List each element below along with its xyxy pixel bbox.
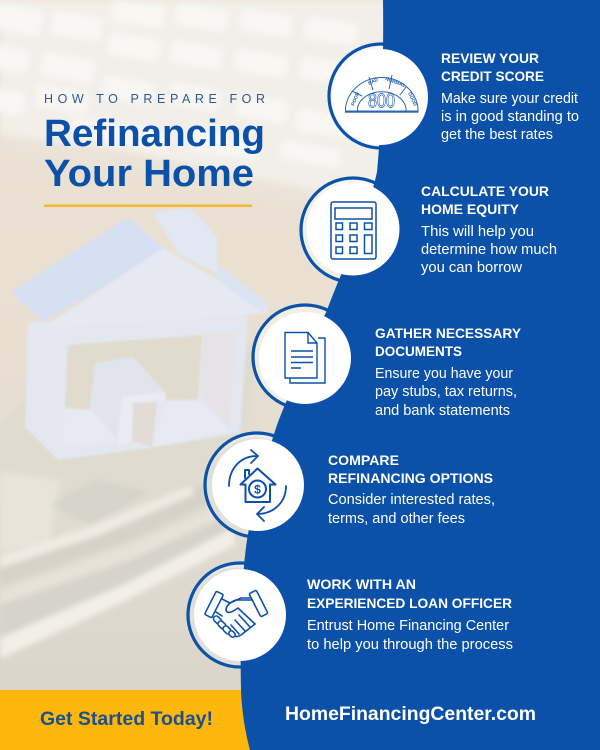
title underline — [44, 204, 252, 207]
text: calculate home equity: you can borrow — [421, 260, 523, 276]
text: experienced loan officer: EXPERIENCED LOAN OFFICER — [307, 595, 512, 611]
text: compare refinancing options: REFINANCING OPTIONS — [328, 470, 493, 486]
text: compare refinancing options — [328, 452, 495, 527]
text: calculate home equity: HOME EQUITY — [421, 201, 520, 217]
text: calculate home equity: determine how much — [421, 242, 557, 258]
text: calculate home equity: This will help you — [421, 224, 534, 240]
icon: calculator — [306, 182, 400, 276]
text: calculate home equity — [421, 183, 557, 276]
text: gather documents — [375, 325, 522, 419]
icon: credit score gauge: 800 — [368, 90, 395, 112]
main title — [44, 113, 265, 195]
text: gather documents: and bank statements — [375, 403, 510, 419]
text: experienced loan officer: to help you through the process — [307, 637, 513, 653]
text: review credit score: Make sure your credit — [441, 91, 578, 107]
small heading: HOW TO PREPARE FOR — [44, 92, 265, 106]
main title: Your Home — [44, 153, 254, 195]
text: review credit score: CREDIT SCORE — [441, 68, 544, 84]
text: review credit score: get the best rates — [441, 127, 553, 143]
text: experienced loan officer — [307, 576, 513, 653]
text: gather documents: GATHER NECESSARY — [375, 325, 522, 341]
text: compare refinancing options: COMPARE — [328, 452, 399, 468]
text: experienced loan officer: Entrust Home Financing Center — [307, 618, 509, 634]
text: review credit score — [441, 50, 579, 143]
icon: credit score gauge: NORMAL — [384, 76, 406, 89]
step 1: credit score — [332, 49, 579, 145]
icon: house with refresh arrows: $ — [254, 482, 261, 496]
icon: credit score gauge: BAD — [367, 77, 380, 87]
step 4: compare options — [212, 439, 495, 531]
step 2: home equity — [306, 182, 557, 276]
main title: Refinancing — [44, 113, 265, 155]
house model — [11, 208, 268, 460]
text: review credit score: REVIEW YOUR — [441, 50, 539, 66]
text: compare refinancing options: terms, and other fees — [328, 511, 465, 527]
call-to-action text: Get Started Today! — [40, 709, 213, 730]
icon: credit score gauge — [332, 49, 428, 145]
keyboard — [0, 0, 385, 215]
icon: documents — [259, 312, 351, 404]
icon: house with refresh arrows — [212, 439, 304, 531]
text: experienced loan officer: WORK WITH AN — [307, 576, 416, 592]
icon: credit score gauge: POOR — [350, 91, 361, 107]
blue curved panel — [241, 0, 600, 750]
decorative rings behind blue panel — [188, 44, 433, 667]
money — [0, 335, 260, 659]
text: review credit score: is in good standing to — [441, 109, 579, 125]
text: calculate home equity: CALCULATE YOUR — [421, 183, 549, 199]
text: compare refinancing options: Consider interested rates, — [328, 492, 495, 508]
text: gather documents: Ensure you have your — [375, 366, 513, 382]
yellow call-to-action band — [0, 690, 260, 750]
text: gather documents: DOCUMENTS — [375, 343, 462, 359]
step 3: documents — [259, 312, 522, 419]
text: gather documents: pay stubs, tax returns, — [375, 384, 517, 400]
icon: credit score gauge: GOOD — [406, 91, 418, 108]
icon: handshake — [194, 569, 286, 661]
step 5: loan officer — [194, 569, 513, 661]
website url: HomeFinancingCenter.com — [285, 703, 536, 725]
